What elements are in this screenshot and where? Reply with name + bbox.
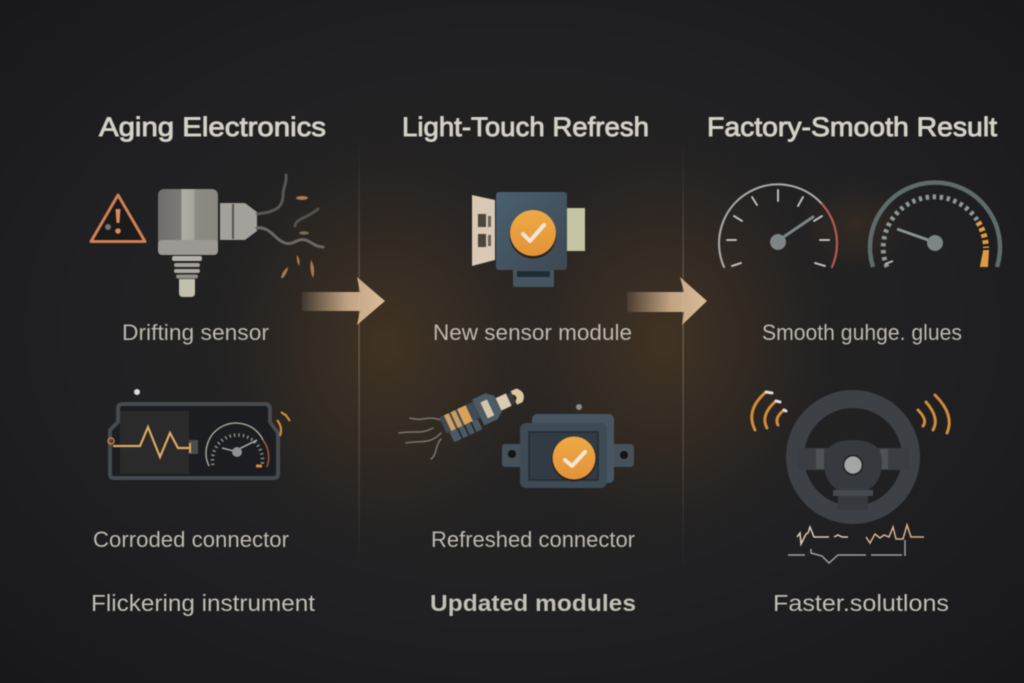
label: New sensor module: New sensor module	[433, 320, 632, 345]
icon: flickering instrument panel	[108, 389, 290, 478]
icon: refreshed module	[502, 404, 634, 488]
heading: Factory-Smooth Result: Factory-Smooth Result	[707, 112, 998, 142]
icon: warning triangle	[91, 195, 145, 242]
icon: gauge, smooth	[719, 184, 837, 267]
label: Updated modules: Updated modules	[430, 590, 636, 616]
icon: drifting sensor	[158, 175, 323, 297]
icon: steering wheel	[752, 392, 949, 515]
icon: gauge, detailed	[870, 182, 1000, 267]
label: Refreshed connector: Refreshed connector	[431, 527, 635, 552]
label: Faster.solutlons: Faster.solutlons	[773, 590, 949, 616]
label: Drifting sensor: Drifting sensor	[122, 320, 269, 345]
label: Corroded connector: Corroded connector	[93, 527, 289, 552]
heading: Light-Touch Refresh: Light-Touch Refresh	[402, 112, 649, 142]
arrow: second transition	[627, 277, 707, 325]
label: Smooth guhge. glues: Smooth guhge. glues	[762, 320, 962, 345]
label: Flickering instrument: Flickering instrument	[91, 590, 316, 616]
arrow: first transition	[302, 277, 385, 325]
icon: smooth signal trace	[788, 525, 924, 563]
icon: new sensor module	[472, 192, 585, 287]
heading: Aging Electronics: Aging Electronics	[99, 112, 326, 142]
icon: spark plug connector	[399, 379, 530, 459]
